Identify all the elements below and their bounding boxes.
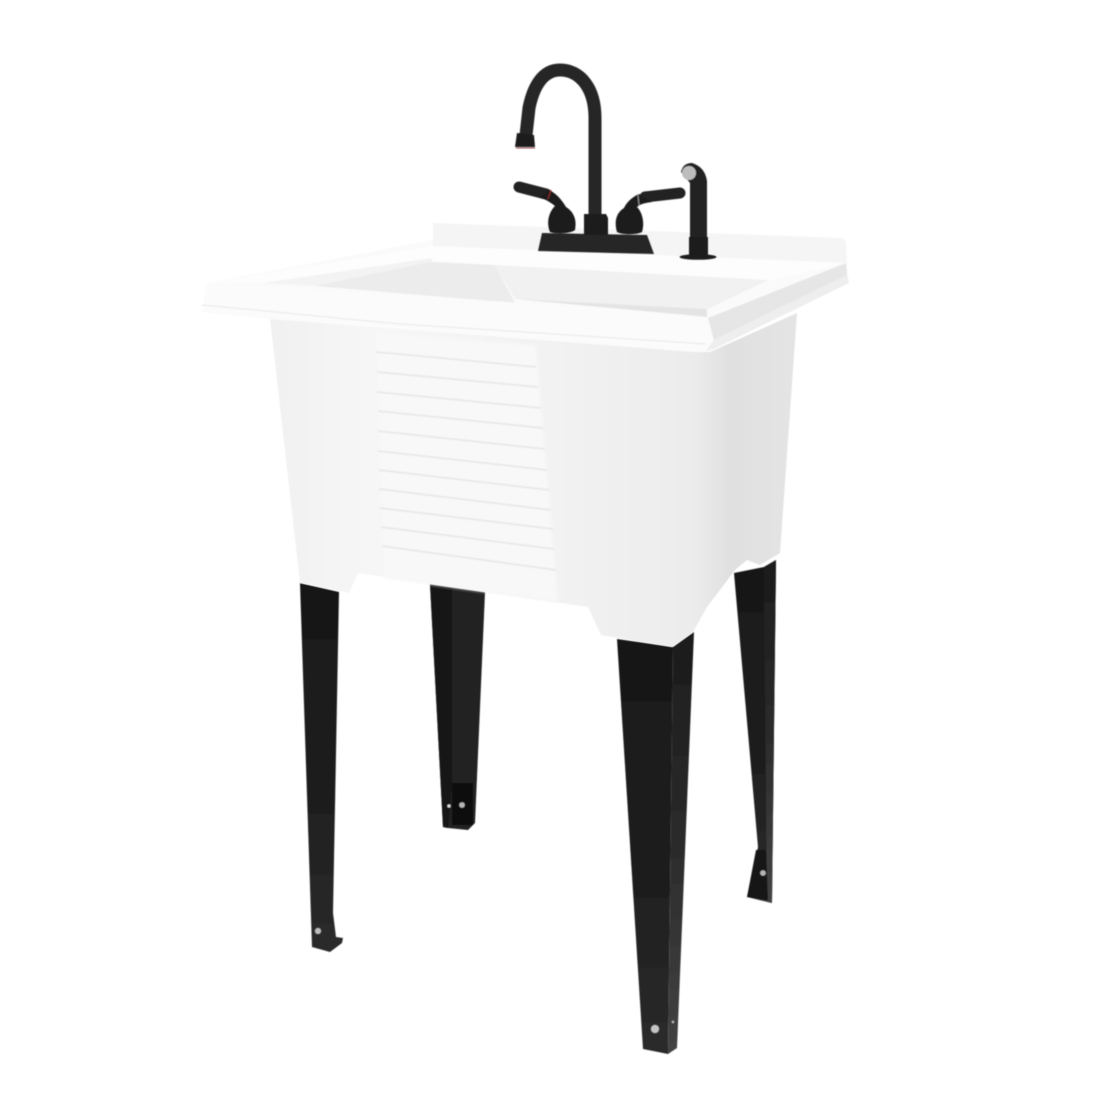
rim front face <box>202 283 710 352</box>
shelf <box>263 258 432 286</box>
rim right face <box>708 263 847 340</box>
rim top surface <box>202 223 849 352</box>
centre nut <box>584 214 608 235</box>
spout <box>515 70 595 216</box>
side sprayer <box>680 163 716 260</box>
leg: front left <box>300 583 343 952</box>
sink rim and basin <box>202 223 849 352</box>
leg: front right <box>617 632 694 1054</box>
handle: right <box>616 193 680 234</box>
backsplash <box>433 223 847 263</box>
leg: back right <box>734 560 776 903</box>
base plate <box>538 233 654 254</box>
basin <box>315 262 515 303</box>
drain ledge <box>515 299 707 317</box>
faucet <box>515 70 716 260</box>
deck <box>207 246 847 283</box>
tub body <box>270 313 797 647</box>
handle: left <box>519 187 576 233</box>
rim right lip <box>706 275 849 351</box>
leg: back left <box>430 584 485 830</box>
washboard panel <box>376 333 558 602</box>
